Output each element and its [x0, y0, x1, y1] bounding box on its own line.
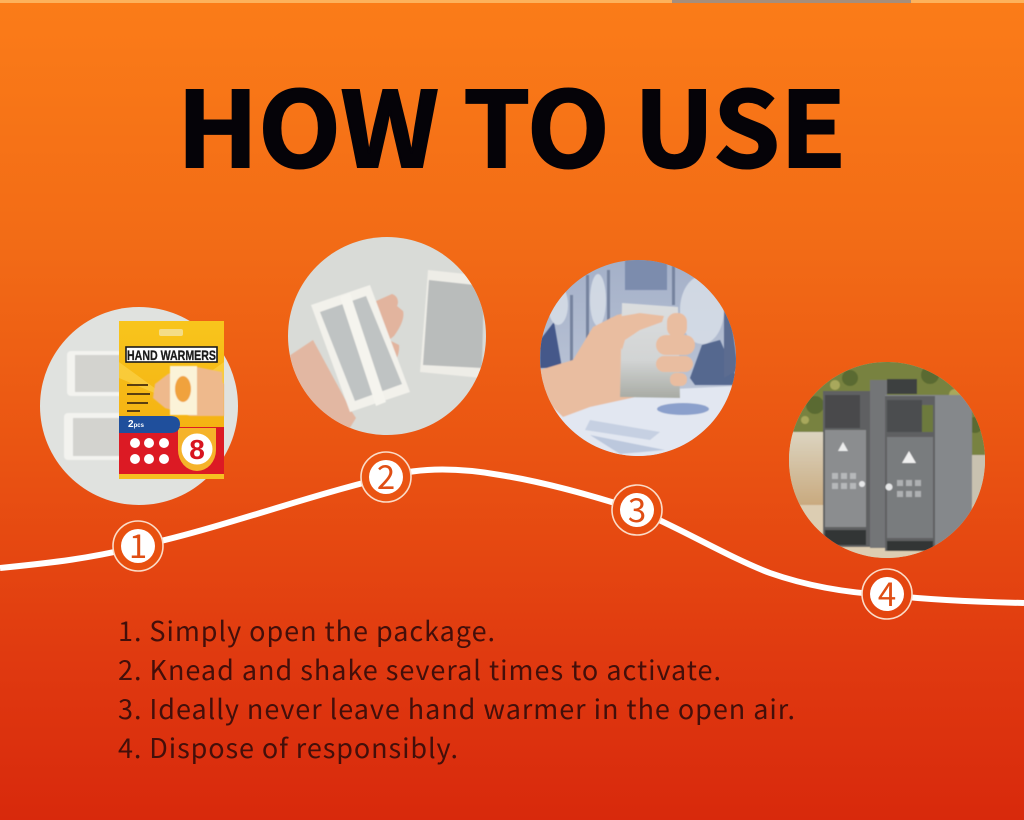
step 1 text: 1. Simply open the package. — [118, 610, 495, 649]
held sachet — [311, 285, 410, 412]
photo 1: open package — [40, 307, 238, 505]
step badge 2: 2 — [377, 451, 395, 499]
step badge 1: 1 — [129, 520, 147, 568]
warmer sachets — [64, 351, 119, 460]
step badge 4: 4 — [878, 568, 896, 616]
top edge strip — [0, 0, 1024, 3]
red panel — [119, 427, 224, 479]
step badge 3: 3 — [628, 484, 646, 532]
step badge 2 — [361, 451, 411, 502]
step badge 3 — [612, 484, 662, 535]
package bullet list — [127, 384, 150, 412]
photo 4: recycling bins — [785, 358, 992, 563]
left bin — [823, 391, 870, 547]
package logo: HAND WARMERS — [127, 347, 216, 363]
photo 3: hand holding warmer in snow — [540, 260, 736, 456]
palm and arm — [540, 310, 640, 417]
right bin — [885, 395, 972, 551]
step badge 4 — [862, 568, 912, 619]
instructions text block — [118, 610, 795, 766]
white route curve — [0, 470, 1024, 603]
title: HOW TO USE — [177, 46, 846, 197]
step badge 1 — [113, 520, 163, 571]
warmer sachet — [620, 303, 680, 398]
8 hours badge: 8 — [189, 434, 205, 465]
blue count banner: 2pcs — [128, 419, 145, 430]
centre post — [870, 380, 887, 548]
hand — [286, 294, 403, 434]
photo 2: kneading warmer — [286, 237, 486, 435]
thumb and fingers — [620, 312, 696, 386]
hand on package — [153, 366, 224, 416]
step 2 text: 2. Knead and shake several times to activate. — [118, 649, 721, 688]
hedge — [793, 362, 985, 456]
blue count banner — [119, 416, 180, 433]
stone wall — [785, 432, 992, 563]
snow ground — [553, 386, 732, 456]
second sachet — [420, 270, 484, 378]
step 4 text: 4. Dispose of responsibly. — [118, 727, 458, 766]
product package — [119, 321, 224, 479]
step 3 text: 3. Ideally never leave hand warmer in the open air. — [118, 688, 795, 727]
winter forest — [540, 258, 740, 385]
